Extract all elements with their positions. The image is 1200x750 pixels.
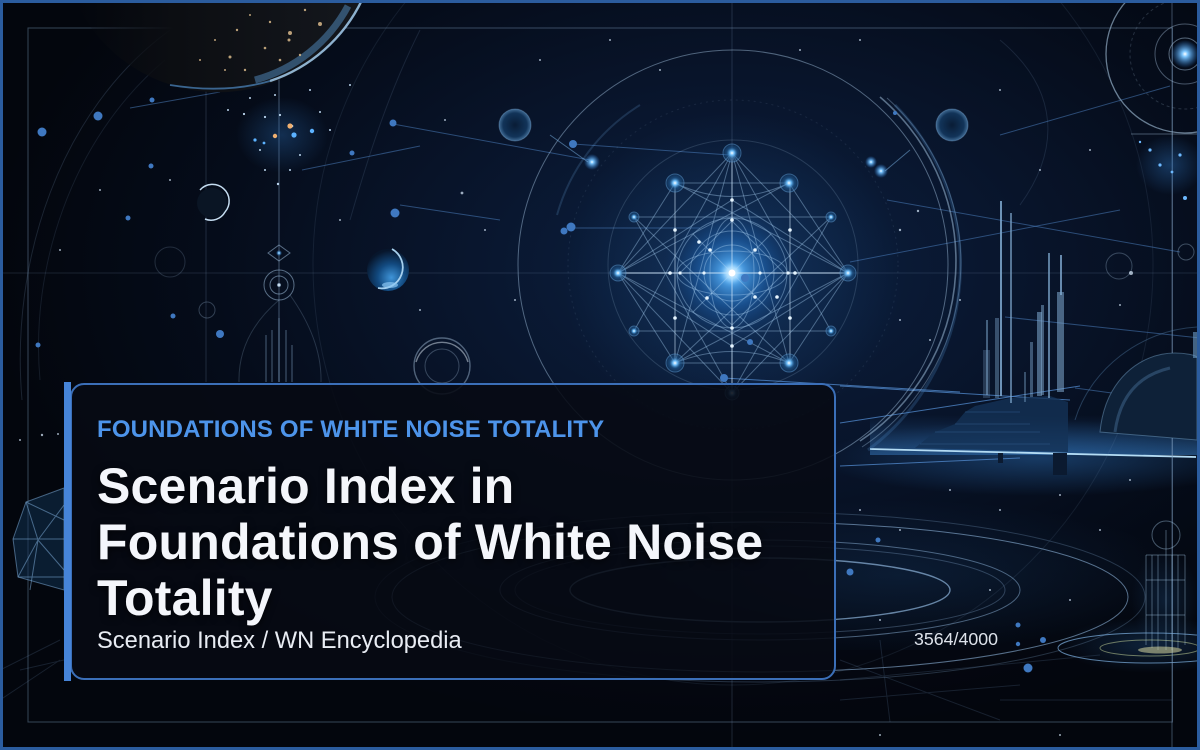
connecting lines with nodes <box>130 86 1200 466</box>
icon: target beacon and tower <box>155 245 321 382</box>
glowing sparks <box>550 135 910 178</box>
icon: glass orbs <box>499 109 968 141</box>
title <box>97 458 763 626</box>
skyline silhouettes on horizon <box>998 453 1067 475</box>
icon: blue sphere <box>367 249 409 291</box>
right foreground fountain tower <box>1131 521 1199 654</box>
page counter: 3564/4000 <box>914 629 998 649</box>
icon: crescent moon <box>197 184 229 220</box>
large mandala rings <box>518 50 961 480</box>
subtitle: Scenario Index / WN Encyclopedia <box>97 628 462 654</box>
top right dial <box>1106 0 1200 279</box>
accent bar <box>64 382 71 681</box>
eyebrow heading: FOUNDATIONS OF WHITE NOISE TOTALITY <box>97 416 604 443</box>
title: Foundations of White Noise <box>97 514 763 570</box>
icon: planet at top left <box>75 0 362 92</box>
star cluster at right edge <box>1136 135 1200 200</box>
icon: ring portal <box>414 338 470 394</box>
title: Scenario Index in <box>97 458 514 514</box>
panel: title card <box>64 382 836 681</box>
icon: wireframe polyhedron <box>13 488 64 590</box>
panel background <box>70 383 836 680</box>
sacred geometry network <box>610 144 856 400</box>
decorative blue dots <box>36 98 1046 672</box>
title: Totality <box>97 570 273 626</box>
star cluster below planet <box>227 84 351 185</box>
futuristic city towers <box>915 201 1068 452</box>
ground plane with orbit rings <box>0 415 1200 722</box>
observatory dome <box>1075 327 1197 440</box>
